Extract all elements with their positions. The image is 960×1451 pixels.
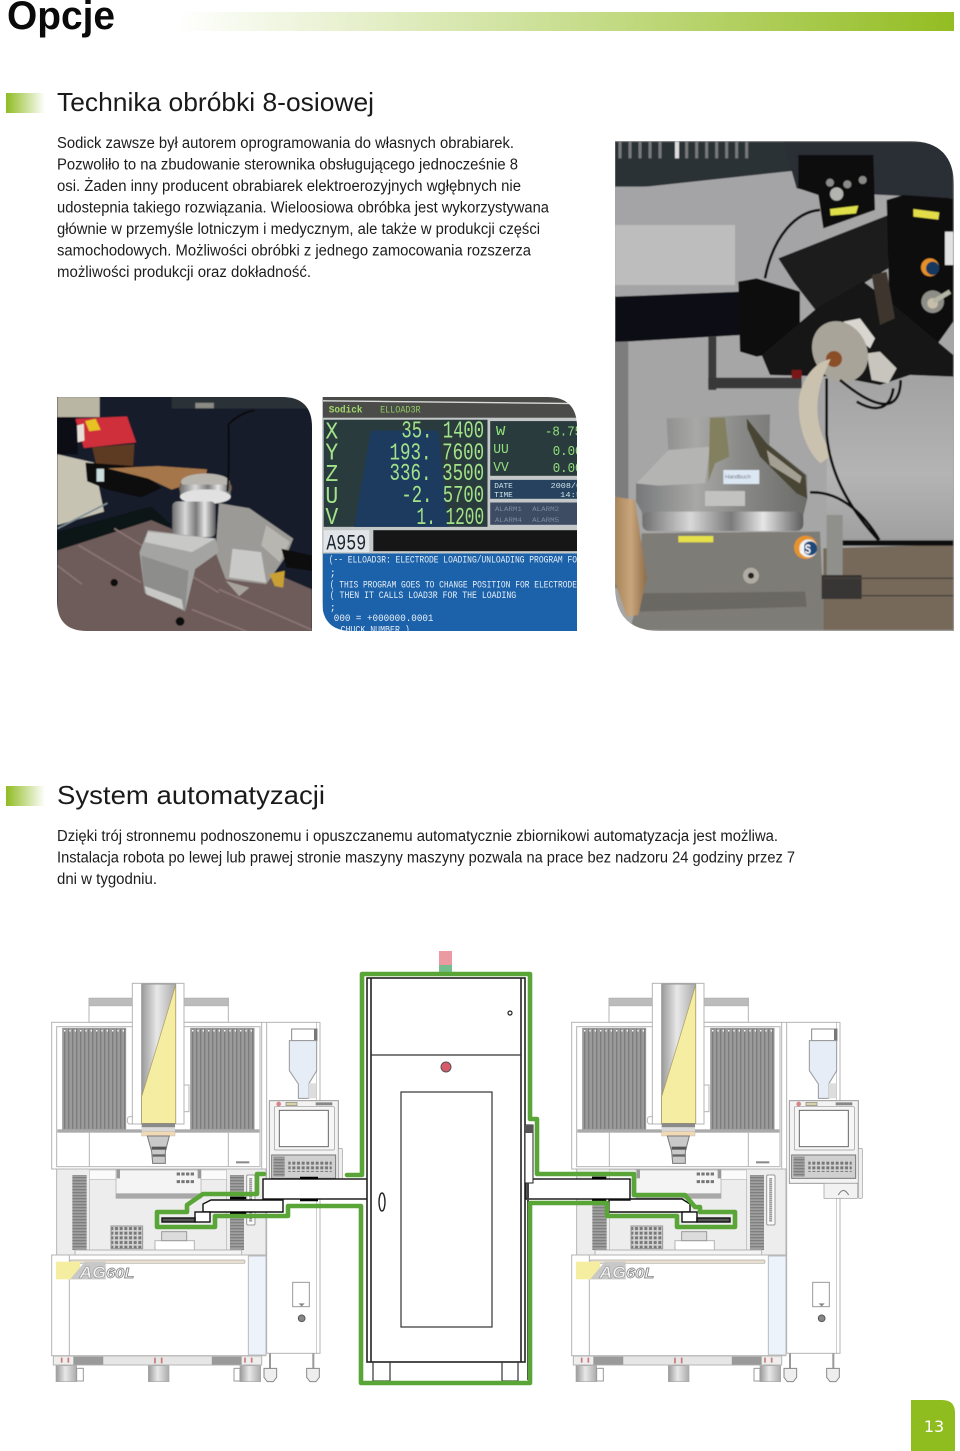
readout text: TIME [494, 492, 513, 500]
text block: 8-axis description: głównie w przemyśle lotniczym i medycznym, ale także w produkcji części [57, 221, 540, 238]
readout text: ; [330, 569, 336, 580]
machine: right AG60L [572, 983, 862, 1382]
section marker: 8-axis [6, 93, 45, 113]
text block: 8-axis description: Sodick zawsze był autorem oprogramowania do własnych obrabiarek. [57, 135, 514, 152]
green safety fence outline [157, 974, 735, 1383]
machine: right AG60L: 60L [626, 1266, 654, 1282]
signal lamp [439, 951, 452, 972]
text block: automation description: dni w tygodniu. [57, 871, 157, 888]
readout text: ELLOAD3R [380, 405, 421, 416]
title gradient bar [178, 12, 954, 31]
text block: 8-axis description: możliwości produkcji oraz dokładność. [57, 264, 311, 281]
readout text: 1. 1200 [417, 505, 484, 532]
readout text: U [325, 484, 338, 511]
readout text: VV [493, 461, 510, 476]
text block: automation description: Instalacja robota po lewej lub prawej stronie maszyny maszyny pozwala na prace bez nadzoru 24 godziny przez 7 [57, 850, 795, 866]
readout text: Y [325, 440, 339, 467]
page number badge [911, 1400, 955, 1451]
photo: rotary axis unit on work table [57, 397, 312, 631]
machine: right AG60L: AG [598, 1263, 626, 1282]
heading: automation system: System automatyzacji [57, 780, 325, 810]
readout text: ( THEN IT CALLS LOAD3R FOR THE LOADING [330, 590, 516, 602]
heading: 8-axis technique: Technika obróbki 8-osiowej [57, 87, 374, 117]
readout text: ( THIS PROGRAM GOES TO CHANGE POSITION FOR ELECTRODE [330, 580, 577, 592]
diagram: automation layout [52, 951, 862, 1383]
readout text: Sodick [329, 404, 363, 416]
robot arm: right [526, 1178, 730, 1222]
text block: 8-axis description [57, 135, 549, 281]
machine: left AG60L: AG [78, 1263, 106, 1282]
readout text: 336. 3500 [390, 461, 484, 488]
readout text: 2008/0 [551, 483, 581, 491]
section marker: automation [6, 786, 45, 806]
robot arm: left [162, 1178, 368, 1222]
readout text: ALARM1 [495, 506, 522, 514]
readout text: 000 = +000000.0001 [334, 614, 433, 625]
readout text [325, 404, 582, 637]
readout text: ALARM5 [532, 517, 559, 525]
readout text: 35. 1400 [401, 419, 484, 446]
readout text: DATE [494, 483, 513, 491]
readout text: UU [493, 443, 509, 458]
machine: left AG60L [52, 983, 342, 1382]
readout text: CHUCK NUMBER ) [341, 625, 410, 637]
central robot cabinet [367, 978, 533, 1381]
readout text: W [496, 425, 506, 440]
readout text: ALARM4 [495, 517, 522, 525]
readout text: 193. 7600 [390, 440, 484, 467]
readout text: 0.00 [553, 445, 582, 460]
text block: 8-axis description: osi. Żaden inny producent obrabiarek elektroerozyjnych wgłębnych nie [57, 177, 521, 195]
text block: automation description: Dzięki trój stronnemu podnoszonemu i opuszczanemu automatycznie zbiornikowi automatyzacja jest możliwa. [57, 828, 778, 845]
readout text: X [325, 419, 339, 446]
photo: Sodick CNC control screen [322, 397, 577, 631]
photo: large 8-axis workpiece and electrode: Handbuch [725, 475, 751, 481]
text block: 8-axis description: Pozwoliło to na zbudowanie sterownika obsługującego jednocześnie 8 [57, 156, 518, 174]
readout text: 0.00 [553, 462, 582, 477]
readout text: ; [330, 603, 336, 614]
readout text: A959 [326, 530, 366, 556]
readout text: -2. 5700 [401, 483, 484, 510]
readout text: V [325, 505, 339, 532]
photo: large 8-axis workpiece and electrode [610, 135, 960, 635]
text block: 8-axis description: udostepnia takiego rozwiązania. Wieloosiowa obróbka jest wykorzystywana [57, 200, 549, 216]
text block: automation description [57, 828, 795, 888]
readout text: ALARM2 [532, 506, 559, 514]
readout text: 14:5 [560, 492, 581, 500]
photo: large 8-axis workpiece and electrode: JS [800, 542, 811, 556]
text block: 8-axis description: samochodowych. Możliwości obróbki z jednego zamocowania rozszerza [57, 242, 531, 260]
readout text: -8.75 [545, 426, 582, 441]
readout text: (-- ELLOAD3R: ELECTRODE LOADING/UNLOADING PROGRAM FO [329, 554, 577, 566]
readout text: Z [325, 462, 338, 489]
page number badge: 13 [924, 1417, 944, 1436]
machine: left AG60L: 60L [106, 1266, 134, 1282]
